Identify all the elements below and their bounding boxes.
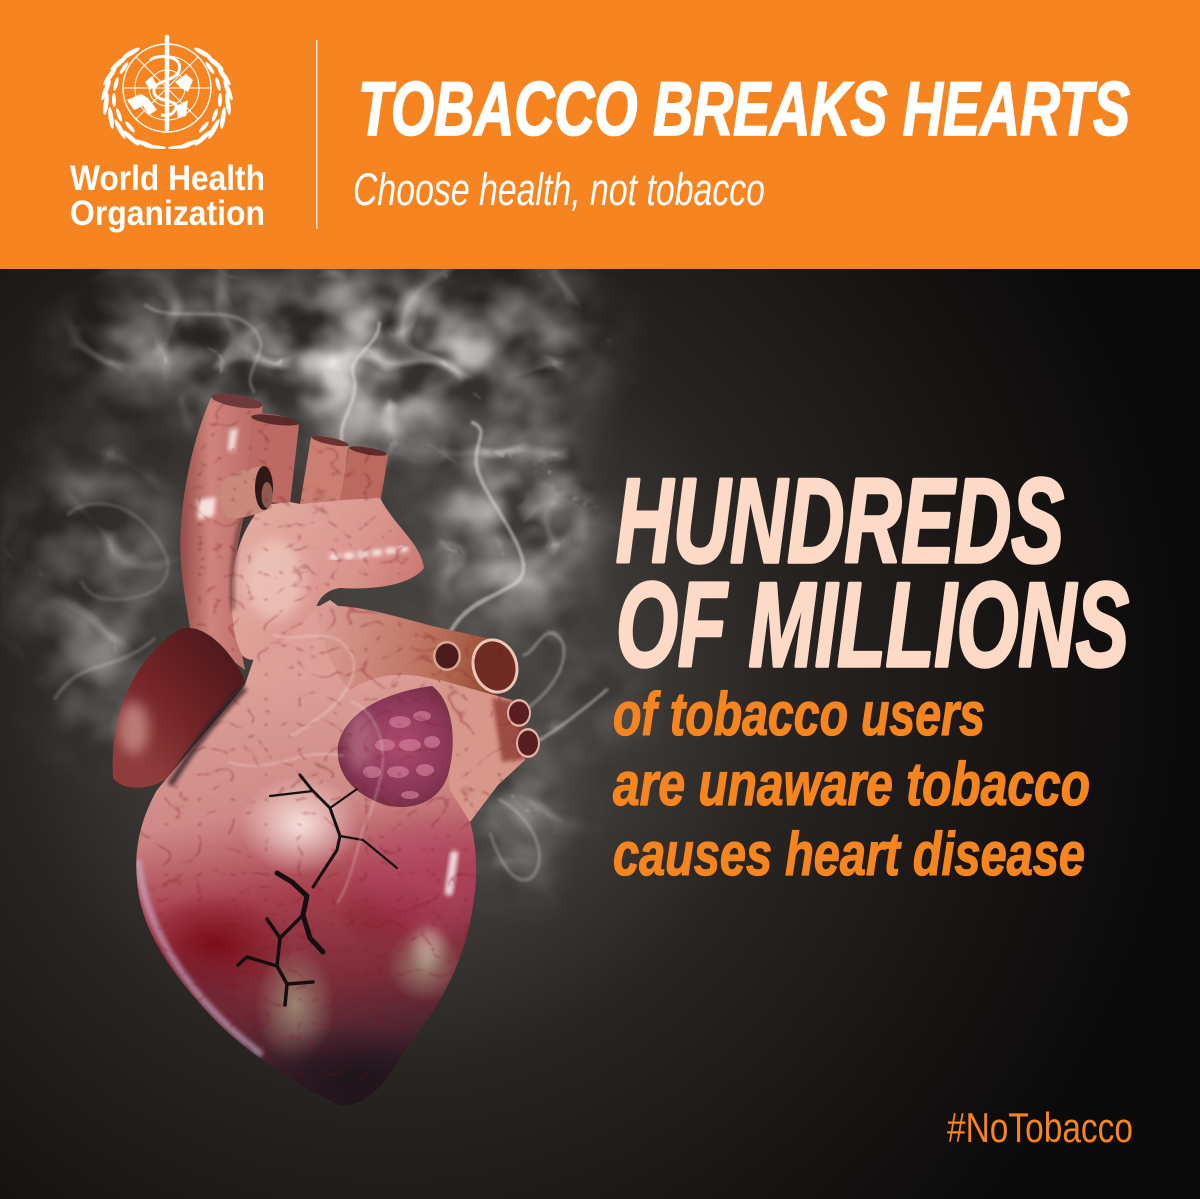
dark background	[0, 269, 1200, 1199]
icon: right atrium	[338, 686, 453, 807]
subtitle: Choose health, not tobacco	[353, 164, 765, 215]
logo text: World Health	[70, 159, 265, 198]
icon: WHO emblem	[100, 37, 234, 150]
statement text	[613, 680, 1090, 888]
logo text: Organization	[70, 194, 265, 233]
vein texture overlay	[138, 400, 520, 1101]
headline: hundreds of millions	[616, 454, 1129, 692]
smoke clouds	[25, 275, 620, 882]
icon: left atrium	[113, 628, 245, 788]
smoke over the heart	[230, 636, 378, 900]
logo text	[70, 159, 265, 233]
icon: ventricle body	[130, 600, 525, 1135]
logo: World Health Organization	[70, 37, 265, 233]
statement text: of tobacco users	[613, 680, 985, 748]
icon: pulmonary trunk vessels	[180, 391, 264, 670]
icon: side vessel opening	[220, 466, 273, 518]
icon: pulmonary veins	[315, 605, 540, 822]
hashtag: #NoTobacco	[947, 1104, 1133, 1151]
header band	[0, 0, 1200, 269]
heart illustration	[112, 394, 540, 1106]
icon: heart cracks	[238, 775, 397, 1005]
icon: aortic arch and branches	[232, 412, 424, 660]
